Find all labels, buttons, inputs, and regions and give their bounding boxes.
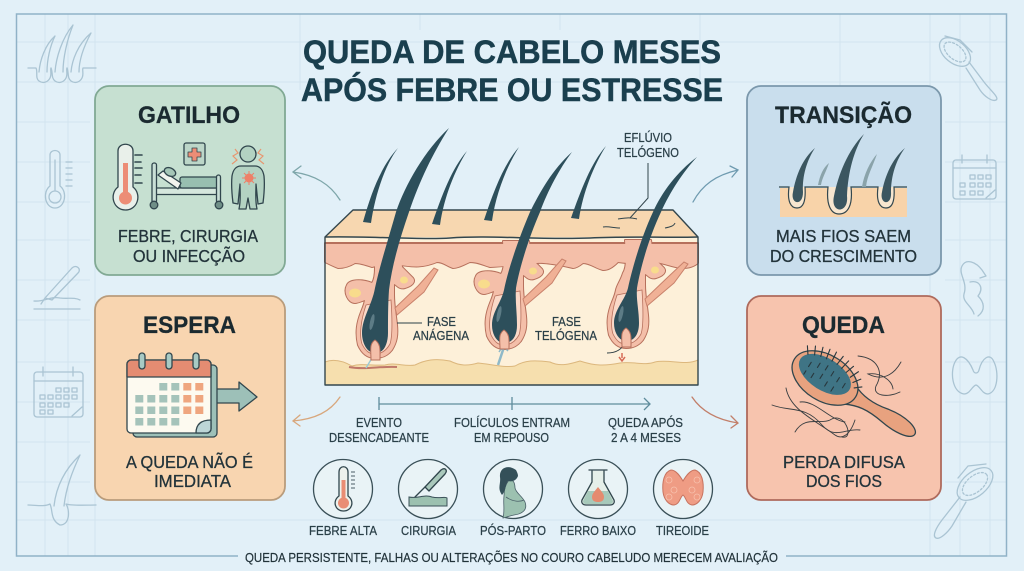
background icon: hairbrush bottom right	[934, 461, 999, 538]
cause: febre alta	[309, 460, 377, 538]
icon: hairbrush with loose hair	[772, 335, 930, 454]
label: TIREOIDE	[656, 523, 709, 538]
background icon: calendar right	[953, 155, 996, 199]
background icon: thermometer left	[45, 150, 72, 208]
icon: hospital bed	[150, 143, 223, 209]
arrow: to transição	[693, 166, 738, 202]
panel: gatilho	[95, 86, 285, 275]
title	[301, 34, 723, 108]
background icon: pregnant figure right	[961, 262, 986, 316]
sebaceous glands	[349, 266, 659, 298]
background icon: hair follicles top left	[28, 25, 96, 82]
label: PÓS-PARTO	[480, 523, 546, 538]
fat layer	[325, 360, 698, 385]
timeline step: folículos entram em repouso: FOLÍCULOS ENTRAM	[454, 415, 570, 430]
heading: gatilho: GATILHO	[138, 102, 240, 129]
timeline step: evento desencadeante: DESENCADEANTE	[329, 430, 429, 445]
label: fase telógena: FASE	[552, 314, 581, 329]
footer note: QUEDA PERSISTENTE, FALHAS OU ALTERAÇÕES NO COURO CABELUDO MERECEM AVALIAÇÃO	[245, 550, 778, 565]
title: APÓS FEBRE OU ESTRESSE	[301, 72, 723, 108]
inner follicle rings	[361, 290, 643, 354]
title: QUEDA DE CABELO MESES	[303, 34, 721, 70]
icon: calendar with arrow	[127, 353, 257, 437]
background icon: hairbrush top right	[934, 32, 997, 100]
timeline step: folículos entram em repouso: EM REPOUSO	[474, 430, 549, 445]
label: FEBRE ALTA	[309, 523, 377, 538]
diagram: skin cross-section	[325, 128, 698, 385]
background icon: calendar left	[34, 367, 83, 417]
text: gatilho description	[118, 226, 258, 266]
label: fase telógena: TELÓGENA	[535, 328, 597, 343]
label: eflúvio telógeno: EFLÚVIO	[624, 130, 672, 145]
text: espera description: IMEDIATA	[154, 471, 231, 491]
dermal vessels	[349, 342, 625, 368]
hair shafts	[362, 128, 697, 352]
timeline step: evento desencadeante: EVENTO	[356, 415, 402, 430]
panel: transição	[747, 86, 941, 275]
heading: transição: TRANSIÇÃO	[775, 101, 912, 129]
icon: body with infection	[232, 146, 264, 209]
label: CIRURGIA	[401, 523, 456, 538]
timeline step: evento desencadeante	[329, 415, 429, 445]
top skin surface	[325, 210, 698, 237]
heading: queda: QUEDA	[802, 312, 885, 339]
skin surface outline	[325, 210, 698, 385]
panel: queda	[747, 296, 941, 500]
arrector muscles	[395, 259, 688, 315]
text: transição description: MAIS FIOS SAEM	[776, 226, 911, 246]
background icon: single hair left	[28, 455, 96, 525]
cause: cirurgia	[398, 460, 458, 538]
timeline step: queda após 2 a 4 meses: 2 A 4 MESES	[611, 430, 681, 445]
label: FERRO BAIXO	[560, 523, 636, 538]
timeline step: queda após 2 a 4 meses: QUEDA APÓS	[608, 415, 683, 430]
label: fase anágena: FASE	[427, 314, 456, 329]
label: eflúvio telógeno: TELÓGENO	[617, 145, 679, 160]
text: transição description: DO CRESCIMENTO	[770, 246, 917, 266]
text: espera description: A QUEDA NÃO É	[126, 451, 253, 472]
text: gatilho description: FEBRE, CIRURGIA	[118, 226, 258, 246]
label: fase telógena	[535, 314, 597, 343]
arrow: to gatilho	[293, 166, 340, 200]
text: transição description	[770, 226, 917, 266]
text: gatilho description: OU INFECÇÃO	[133, 245, 245, 266]
icon: thermometer	[113, 144, 142, 210]
cause: tireoide	[654, 460, 712, 538]
timeline	[329, 397, 683, 445]
arrow: to queda	[692, 397, 738, 428]
label: fase anágena: ANÁGENA	[413, 328, 469, 343]
heading: espera: ESPERA	[143, 312, 236, 339]
cause: ferro baixo	[560, 460, 636, 538]
background icon: surgical pen left	[34, 267, 80, 309]
text: espera description	[126, 451, 253, 491]
dermis	[325, 237, 698, 385]
epidermis band and follicle sheaths: outlines	[325, 240, 698, 358]
text: queda description	[783, 452, 905, 491]
text: queda description: PERDA DIFUSA	[783, 452, 905, 472]
label: fase anágena	[397, 314, 469, 343]
background icon: thyroid right	[952, 357, 997, 394]
panel: espera	[95, 296, 285, 500]
timeline step: folículos entram em repouso	[454, 415, 570, 445]
cause: pós-parto	[480, 460, 546, 538]
text: queda description: DOS FIOS	[806, 471, 882, 491]
arrow: to espera	[293, 397, 340, 426]
hair bulbs and papillae	[368, 306, 631, 360]
icon: follicles in transition	[779, 134, 907, 217]
timeline step: queda após 2 a 4 meses	[608, 415, 683, 445]
label: eflúvio telógeno	[603, 130, 679, 228]
epidermis band and follicle sheaths: fills	[325, 240, 698, 358]
